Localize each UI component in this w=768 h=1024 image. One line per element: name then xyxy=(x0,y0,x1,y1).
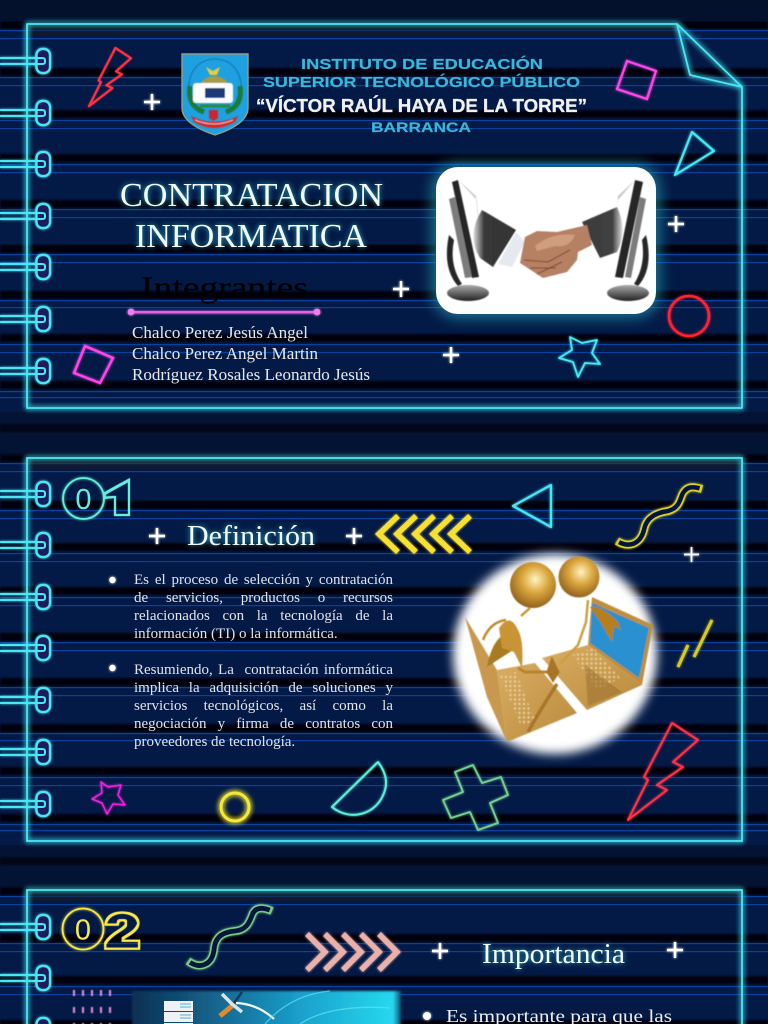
number 02: 0 xyxy=(75,914,91,946)
definition paragraph 1: información (TI) o la informática. xyxy=(134,626,338,642)
spiral binding rings xyxy=(0,915,50,1024)
panel inner top shade xyxy=(28,459,741,469)
title xyxy=(120,177,383,255)
icon: yellow wave xyxy=(617,487,702,545)
team members: Chalco Perez Jesús Angel xyxy=(132,323,308,342)
team members: Rodríguez Rosales Leonardo Jesús xyxy=(132,365,370,384)
number 01 xyxy=(63,474,131,527)
panel inner top shade xyxy=(28,25,678,35)
institute name: BARRANCA xyxy=(371,119,471,135)
definition paragraph 1: Es el proceso de selección y contratación xyxy=(134,572,393,588)
number 01: 0 xyxy=(75,484,92,516)
pink dots xyxy=(74,990,110,1024)
definition paragraph 1 xyxy=(134,572,393,642)
number 01: 1 xyxy=(104,474,131,527)
icon: green wave xyxy=(188,908,272,965)
team members xyxy=(132,323,370,384)
definition paragraph 2: negociación y firma de contratos con xyxy=(134,716,393,732)
plus signs xyxy=(149,528,362,544)
institute name: “VÍCTOR RAÚL HAYA DE LA TORRE” xyxy=(256,95,587,116)
panel frame xyxy=(27,890,742,1024)
team members: Chalco Perez Angel Martin xyxy=(132,344,318,363)
icon: yellow slashes xyxy=(678,620,712,667)
plus signs xyxy=(432,942,683,959)
pink chevrons xyxy=(307,934,397,970)
panel: 01 definicion xyxy=(0,452,748,847)
plus small xyxy=(684,547,699,562)
definition paragraph 1: relacionados con la tecnología de la xyxy=(134,608,393,624)
institute name xyxy=(256,55,587,135)
panel: 02 importancia xyxy=(0,884,748,1024)
icon: magenta star xyxy=(92,782,125,814)
icon: red circle xyxy=(669,296,709,336)
network image xyxy=(132,991,401,1024)
definition paragraph 2: implica la adquisición de soluciones y xyxy=(134,680,393,696)
yellow chevrons xyxy=(379,516,470,552)
heading: Integrantes: Integrantes xyxy=(141,271,308,304)
icon: magenta square left xyxy=(74,346,113,383)
icon: plus sign xyxy=(144,94,160,110)
bullet dots xyxy=(109,577,116,671)
handshake image xyxy=(432,163,660,318)
definition paragraph 2: Resumiendo, La contratación informática xyxy=(134,662,393,678)
heading: Importancia: Importancia xyxy=(482,939,626,970)
icon: red lightning bolt xyxy=(89,48,131,106)
icon: teal half disc xyxy=(332,762,386,815)
plus signs xyxy=(393,216,684,363)
spiral binding rings xyxy=(0,482,50,816)
icon: magenta square xyxy=(617,61,656,99)
magenta divider xyxy=(128,309,320,315)
panel inner top shade xyxy=(28,891,741,901)
bullet dot xyxy=(423,1012,431,1020)
definition paragraph 2 xyxy=(134,662,393,750)
title: INFORMATICA xyxy=(135,218,367,255)
icon: cyan triangle xyxy=(675,132,714,175)
icon: cyan star xyxy=(559,337,600,377)
panel: header / title xyxy=(0,18,748,414)
icon: green cross xyxy=(443,765,508,830)
number 02: 2 xyxy=(105,904,140,958)
title: CONTRATACION xyxy=(120,177,383,214)
heading: Definición: Definición xyxy=(187,521,315,552)
definition paragraph 2: proveedores de tecnología. xyxy=(134,734,295,750)
institute name: INSTITUTO DE EDUCACIÓN xyxy=(301,55,543,73)
institute name: SUPERIOR TECNOLÓGICO PÚBLICO xyxy=(263,73,580,91)
panel frame xyxy=(27,458,742,841)
definition paragraph 1: de servicios, productos o recursos xyxy=(134,590,393,606)
panel frame with folded corner xyxy=(27,24,742,408)
icon: red lightning bolt xyxy=(628,723,698,820)
gold figures image xyxy=(453,554,657,754)
number 02 xyxy=(62,904,140,958)
icon: yellow ring xyxy=(221,793,249,821)
definition paragraph 2: servicios tecnológicos, así como la xyxy=(134,698,393,714)
spiral binding rings xyxy=(0,49,50,383)
logo: institute shield xyxy=(182,54,248,135)
icon: cyan triangle xyxy=(513,485,551,527)
